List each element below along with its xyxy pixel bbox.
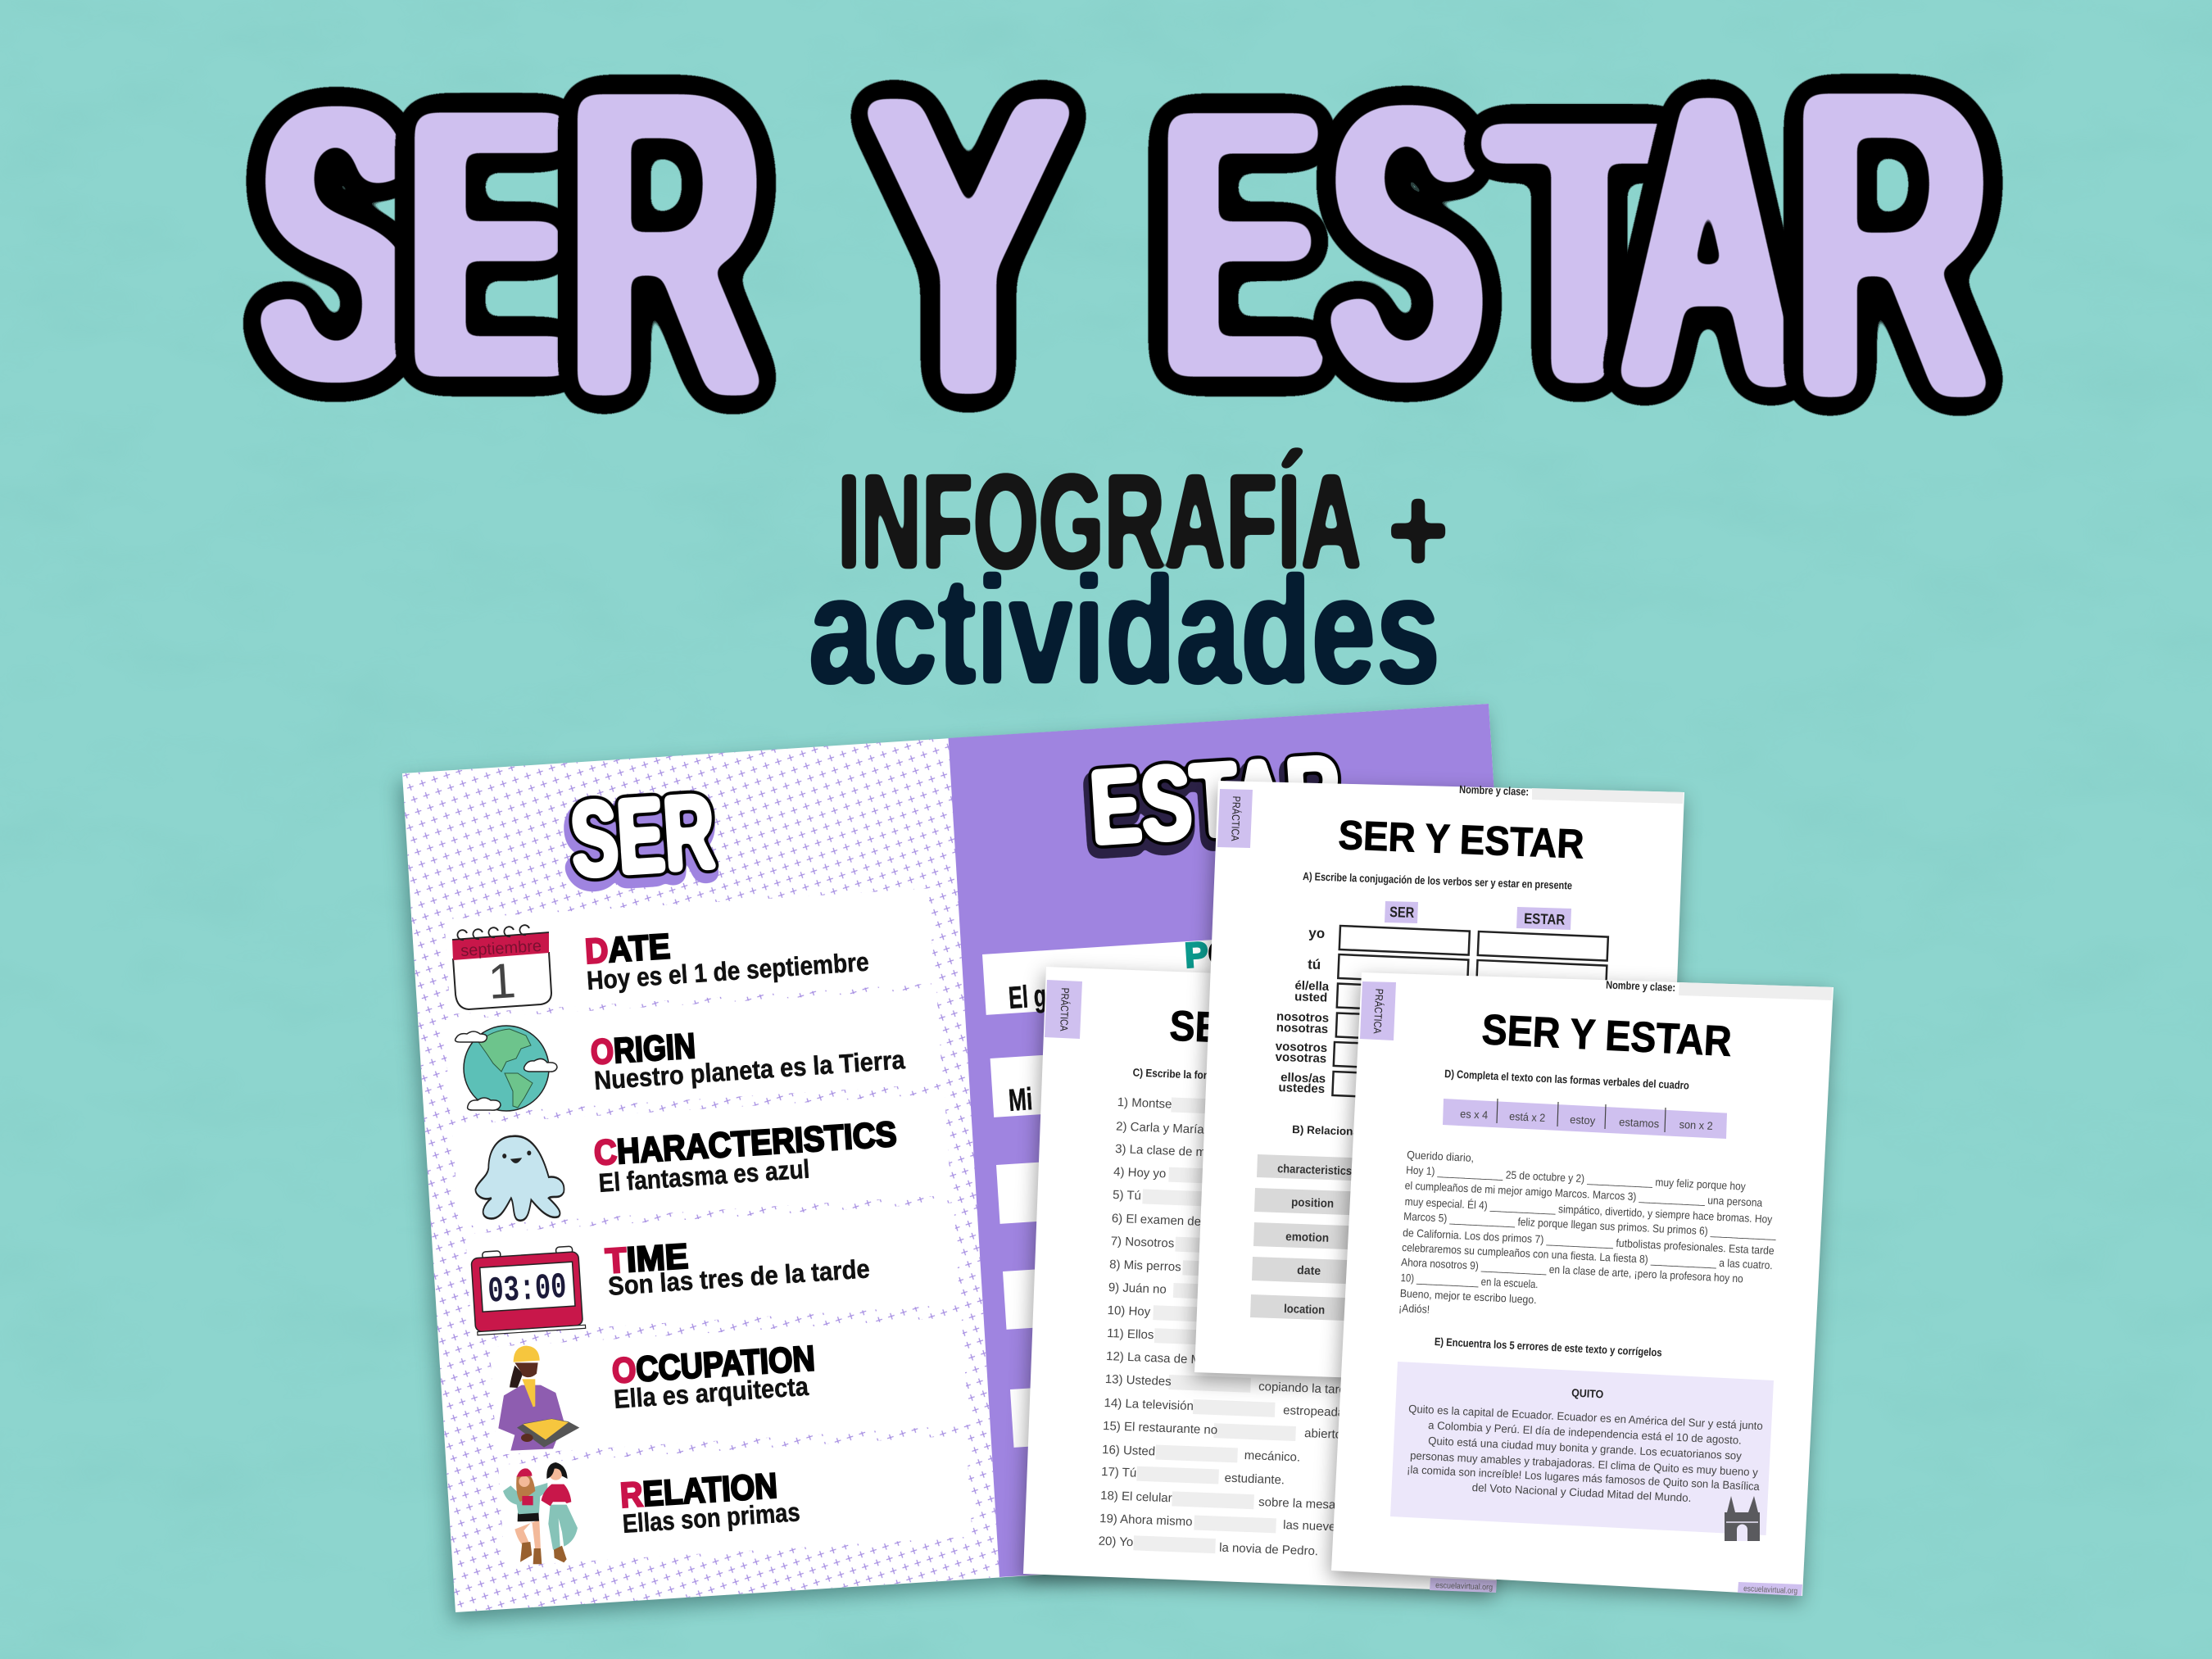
row: time: TIME <box>605 1237 689 1281</box>
icon: calendar: septiembre <box>460 937 542 960</box>
title: SER Y ESTAR: S <box>263 36 406 452</box>
quito box: personas muy amables y trabajadoras. El clima de Quito es muy bueno y <box>1410 1449 1758 1479</box>
quito box: a Colombia y Perú. El día de independencia está el 10 de agosto. <box>1428 1419 1742 1447</box>
icon: digital clock: 03:00 <box>487 1267 568 1313</box>
title: SER Y ESTAR: E <box>1163 41 1318 448</box>
row: occupation: Ella es arquitecta <box>613 1371 809 1414</box>
exercise list: 2) Carla y María <box>1116 1120 1205 1137</box>
exercise list: 14) La televisión <box>1104 1396 1194 1413</box>
sheet paper <box>1023 967 1520 1592</box>
word bank: está x 2 <box>1509 1110 1546 1124</box>
row: relation <box>619 1466 801 1539</box>
quito box: del Voto Nacional y Ciudad Mitad del Mundo. <box>1471 1481 1692 1504</box>
quito box: QUITO <box>1571 1387 1604 1400</box>
pronoun labels: vosotros <box>1276 1040 1327 1055</box>
row: characteristics <box>593 1115 898 1198</box>
exercise list: 10) Hoy <box>1107 1303 1151 1319</box>
word bank: estoy <box>1570 1113 1596 1127</box>
exercise list: 15) El restaurante no <box>1103 1419 1217 1437</box>
letter text: Querido diario, <box>1407 1149 1474 1164</box>
icon: ghost <box>475 1136 564 1221</box>
pronoun labels <box>1275 925 1330 1096</box>
row: time: Son las tres de la tarde <box>607 1253 871 1301</box>
exercise list: estropeada. <box>1283 1403 1349 1420</box>
letter text: el cumpleaños de mi mejor amigo Marcos. Marcos 3) ____________ una persona <box>1404 1179 1763 1209</box>
use bars: date <box>1297 1264 1321 1278</box>
name field <box>1459 783 1684 804</box>
letter text: celebraremos su cumpleaños con una fiesta. La fiesta 8) ____________ a las cuatro. <box>1402 1241 1773 1271</box>
estar rows: Mi <box>1008 1082 1034 1118</box>
row: occupation: OCCUPATION <box>611 1339 816 1391</box>
letter text: Marcos 5) ____________ feliz porque llegan sus primos. Su primos 6) ____________ <box>1403 1210 1776 1240</box>
conjugation boxes <box>1332 926 1608 1101</box>
tag: SER: SER <box>1389 904 1415 921</box>
title: SER Y ESTAR: S <box>1333 35 1478 453</box>
use bars <box>1250 1154 1389 1322</box>
title: SER Y ESTAR: R <box>570 9 762 478</box>
tag: SER <box>1385 901 1418 923</box>
exercise list: 7) Nosotros <box>1110 1235 1175 1251</box>
ESTAR purple half <box>949 704 1542 1577</box>
instruction A: A) Escribe la conjugación de los verbos ser y estar en presente <box>1303 870 1573 891</box>
letter text <box>1398 1149 1776 1316</box>
pronoun labels: tú <box>1308 956 1321 972</box>
row: characteristics: El fantasma es azul <box>598 1154 810 1198</box>
row: date: DATE <box>584 927 671 972</box>
name field: Nombre y clase: <box>1606 979 1675 994</box>
title: SER Y ESTAR: A <box>1632 17 1785 467</box>
use bars: position <box>1291 1196 1334 1211</box>
exercise list: 16) Usted <box>1102 1443 1155 1458</box>
row: occupation <box>611 1339 816 1414</box>
pronoun labels: vosotras <box>1275 1050 1326 1066</box>
panel: infographic poster <box>402 704 1542 1612</box>
exercise list: 13) Ustedes <box>1105 1372 1172 1389</box>
exercise list: 17) Tú <box>1101 1465 1137 1480</box>
title: SER Y ESTAR: R <box>1796 9 1988 481</box>
exercise list: 1) Montse <box>1117 1095 1172 1112</box>
letter text: Ahora nosotros 9) ____________ en la clase de arte, ¡pero la profesora hoy no <box>1401 1256 1743 1285</box>
estar rows <box>982 921 1537 1448</box>
word bank <box>1443 1099 1727 1139</box>
instruction E: E) Encuentra los 5 errores de este texto y corrígelos <box>1435 1335 1662 1359</box>
sheet paper <box>1331 972 1834 1596</box>
heading: ESTAR: ESTAR <box>1087 734 1344 867</box>
exercise list: abierto. <box>1304 1426 1346 1442</box>
instruction D: D) Completa el texto con las formas verbales del cuadro <box>1444 1067 1689 1092</box>
pronoun labels: ustedes <box>1278 1081 1325 1096</box>
subtitle: INFOGRAFÍA +: INFOGRAFÍA <box>837 446 1362 596</box>
sheet title: SER Y ESTAR <box>1169 1003 1421 1059</box>
pronoun labels: yo <box>1308 925 1326 941</box>
row: origin: Nuestro planeta es la Tierra <box>593 1045 906 1095</box>
exercise list: 6) El examen de historia <box>1112 1212 1244 1231</box>
row: relation: RELATION <box>619 1466 778 1516</box>
footer tag: escuelavirtual.org <box>1435 1581 1493 1593</box>
exercise list: 3) La clase de matemáticas <box>1115 1142 1266 1162</box>
name field: Nombre y clase: <box>1459 783 1529 798</box>
letter text: Hoy 1) ____________ 25 de octubre y 2) ____________ muy feliz porque hoy <box>1406 1164 1746 1193</box>
panel: worksheet A <box>1194 781 1684 1389</box>
tab label: PRÁCTICA <box>1058 987 1072 1031</box>
quito box <box>1390 1362 1774 1535</box>
tag: ESTAR <box>1516 907 1571 930</box>
icon: two cousins <box>503 1462 578 1564</box>
icon: calendar <box>452 925 551 1009</box>
exercise list: 4) Hoy yo <box>1113 1165 1167 1181</box>
quito box: Quito es la capital de Ecuador. Ecuador es en América del Sur y está junto <box>1408 1403 1763 1432</box>
icon: earth <box>456 1026 557 1111</box>
letter text: Bueno, mejor te escribo luego. <box>1399 1287 1537 1306</box>
word bank: son x 2 <box>1679 1118 1713 1132</box>
exercise list <box>1098 1095 1353 1558</box>
exercise list: 18) El celular <box>1100 1489 1172 1505</box>
use bars: emotion <box>1285 1231 1329 1245</box>
exercise list: 9) Juán no <box>1108 1281 1167 1297</box>
exercise list: copiando la tarea <box>1258 1380 1353 1397</box>
icon: calendar: 1 <box>487 953 517 1009</box>
pronoun labels: nosotros <box>1276 1009 1329 1025</box>
row: date <box>584 927 870 995</box>
tab: práctica <box>1045 980 1082 1039</box>
letter text: muy especial. Él 4) ____________ simpático, divertido, y siempre hace bromas. Hoy <box>1404 1195 1773 1226</box>
letter text: de California. Los dos primos 7) ____________ futbolistas profesionales. Esta tarde <box>1403 1226 1775 1257</box>
icon: architect <box>498 1346 579 1451</box>
sheet title: SER Y ESTAR <box>1338 812 1585 868</box>
footer tag <box>1430 1578 1497 1593</box>
icon: digital clock <box>471 1245 586 1335</box>
panel: worksheet C <box>1023 967 1520 1593</box>
tab: práctica <box>1217 789 1253 848</box>
tab label: PRÁCTICA <box>1229 796 1243 841</box>
exercise list: mecánico. <box>1244 1448 1300 1465</box>
subtitle: actividades: actividades <box>809 546 1440 715</box>
quito box: ¡la comida son increíble! Los lugares más famosos de Quito son la Basílica <box>1407 1463 1761 1493</box>
estar rows: El g <box>1008 979 1048 1016</box>
row: origin: ORIGIN <box>590 1027 696 1072</box>
pronoun labels: usted <box>1294 990 1327 1005</box>
tag: ESTAR: ESTAR <box>1524 910 1566 928</box>
exercise list: la novia de Pedro. <box>1219 1541 1318 1558</box>
subtitle: INFOGRAFÍA +: + <box>1388 460 1448 598</box>
use bars: location <box>1284 1303 1325 1317</box>
footer tag: escuelavirtual.org <box>1743 1584 1797 1596</box>
footer tag <box>1738 1582 1802 1596</box>
row: date: Hoy es el 1 de septiembre <box>586 947 870 995</box>
exercise list: 8) Mis perros <box>1109 1258 1181 1274</box>
exercise list: 19) Ahora mismo <box>1099 1512 1193 1529</box>
title: SER Y ESTAR: T <box>1489 53 1670 454</box>
title: SER Y ESTAR: E <box>410 39 568 448</box>
pronoun labels: nosotras <box>1276 1021 1328 1036</box>
instruction B: B) Relaciona los usos <box>1292 1123 1407 1140</box>
sheet title: SER Y ESTAR <box>1480 1006 1733 1066</box>
exercise list: 20) Yo <box>1098 1534 1134 1549</box>
estar rows: POSITION <box>1184 926 1354 976</box>
poster dotted texture <box>402 738 999 1612</box>
word bank: estamos <box>1619 1116 1660 1130</box>
instruction C: C) Escribe la forma correcta de los verbos ser y estar <box>1132 1067 1379 1088</box>
use bars: characteristics <box>1277 1163 1352 1178</box>
letter text: 10) ____________ en la escuela. <box>1400 1271 1539 1290</box>
quito box: Quito está una ciudad muy bonita y grande. Los ecuatorianos soy <box>1428 1435 1742 1462</box>
exercise list: las nueve. <box>1283 1518 1339 1534</box>
row backgrounds <box>444 888 972 1566</box>
row: relation: Ellas son primas <box>622 1497 801 1539</box>
exercise list: estudiante. <box>1224 1471 1285 1487</box>
exercise list: 5) Tú <box>1113 1188 1141 1203</box>
exercise list: 11) Ellos <box>1107 1326 1154 1342</box>
letter text: ¡Adiós! <box>1398 1302 1430 1316</box>
title: SER Y ESTAR <box>263 9 1988 481</box>
title: SER Y ESTAR: Y <box>870 17 1067 475</box>
tab label: PRÁCTICA <box>1371 988 1385 1034</box>
answer blanks <box>1133 1098 1296 1553</box>
word bank: es x 4 <box>1460 1108 1489 1122</box>
exercise list: sobre la mesa. <box>1258 1495 1339 1512</box>
row: characteristics: CHARACTERISTICS <box>593 1115 898 1173</box>
tab: práctica <box>1360 981 1396 1040</box>
icon: basilica <box>1725 1496 1760 1541</box>
heading: SER: SER <box>567 771 718 900</box>
sheet paper <box>1194 781 1684 1389</box>
pronoun labels: él/ella <box>1294 979 1330 994</box>
name field <box>1606 979 1833 1000</box>
pronoun labels: ellos/as <box>1281 1071 1326 1086</box>
poster paper <box>402 704 1542 1612</box>
exercise list: 12) La casa de María <box>1106 1349 1223 1367</box>
panel: worksheet D <box>1331 972 1834 1596</box>
